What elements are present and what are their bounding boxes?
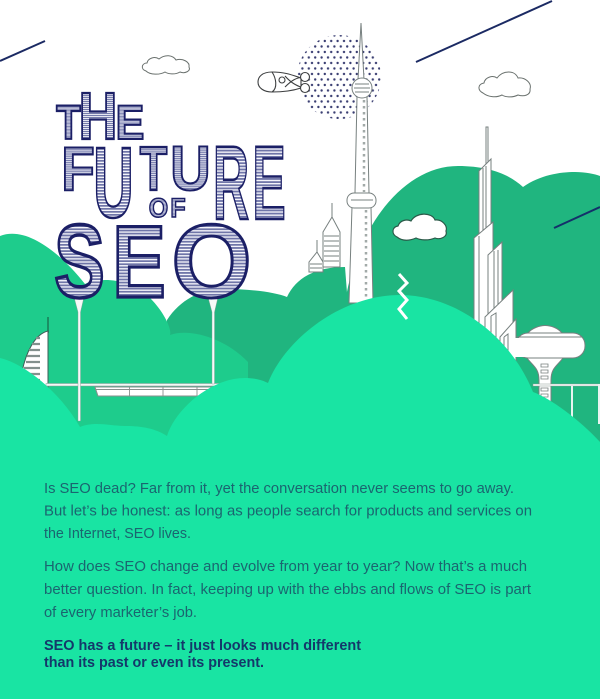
diagonal line top right bbox=[416, 1, 552, 62]
bold conclusion: SEO has a future – it just looks much different bbox=[44, 638, 361, 654]
title word: FUTURE: R bbox=[213, 126, 249, 242]
intro paragraph 1: the Internet, SEO lives. bbox=[44, 526, 191, 542]
dotted sun circle bbox=[297, 35, 381, 119]
intro paragraph 1 bbox=[44, 481, 532, 542]
title word: THE: H bbox=[79, 78, 117, 153]
title word: THE: T bbox=[56, 97, 81, 150]
title word: SEO: S bbox=[54, 205, 105, 320]
intro paragraph 2: of every marketer’s job. bbox=[44, 605, 197, 621]
intro paragraph 2: better question. In fact, keeping up with the ebbs and flows of SEO is part bbox=[44, 582, 531, 598]
title word: FUTURE bbox=[61, 126, 286, 242]
burj skyscraper bbox=[474, 127, 516, 370]
bold conclusion bbox=[44, 638, 361, 671]
diagonal line left bbox=[0, 41, 45, 61]
saucer tower bbox=[514, 326, 585, 413]
rocket bbox=[258, 72, 310, 92]
bold conclusion: than its past or even its present. bbox=[44, 655, 264, 671]
title bbox=[54, 78, 286, 320]
cloud: top left bbox=[142, 56, 189, 74]
mid hills bbox=[0, 234, 248, 440]
tower bbox=[347, 23, 376, 303]
title word: FUTURE: U bbox=[170, 133, 211, 204]
sail building bbox=[22, 317, 48, 400]
title word: THE bbox=[56, 78, 144, 153]
title word: FUTURE: E bbox=[252, 126, 286, 242]
small skyscrapers bbox=[309, 203, 340, 272]
cloud: top right bbox=[479, 72, 530, 97]
title word: SEO bbox=[54, 203, 252, 320]
title word: FUTURE: F bbox=[61, 135, 95, 204]
intro paragraph 2: How does SEO change and evolve from year to year? Now that’s a much bbox=[44, 559, 527, 575]
intro paragraph 1: But let’s be honest: as long as people search for products and services on bbox=[44, 504, 532, 520]
front hills: bright green bbox=[0, 295, 600, 699]
back hills: dark green bbox=[167, 166, 600, 460]
title word: THE: E bbox=[116, 96, 144, 150]
title word: SEO: O bbox=[171, 203, 252, 319]
title word: FUTURE: T bbox=[140, 134, 167, 204]
title word: SEO: E bbox=[112, 206, 166, 319]
elevated road and train bbox=[46, 297, 228, 421]
title word: FUTURE: U bbox=[93, 128, 134, 239]
intro paragraph 1: Is SEO dead? Far from it, yet the conversation never seems to go away. bbox=[44, 481, 514, 497]
road and poles right bbox=[533, 384, 600, 426]
title word: OF bbox=[149, 192, 186, 223]
zigzag bbox=[399, 274, 407, 319]
intro paragraph 2 bbox=[44, 559, 531, 621]
cloud: center bbox=[393, 214, 446, 240]
diagonal line on hill bbox=[554, 207, 600, 228]
title word: OF: O bbox=[149, 192, 168, 223]
title word: OF: F bbox=[170, 192, 186, 223]
